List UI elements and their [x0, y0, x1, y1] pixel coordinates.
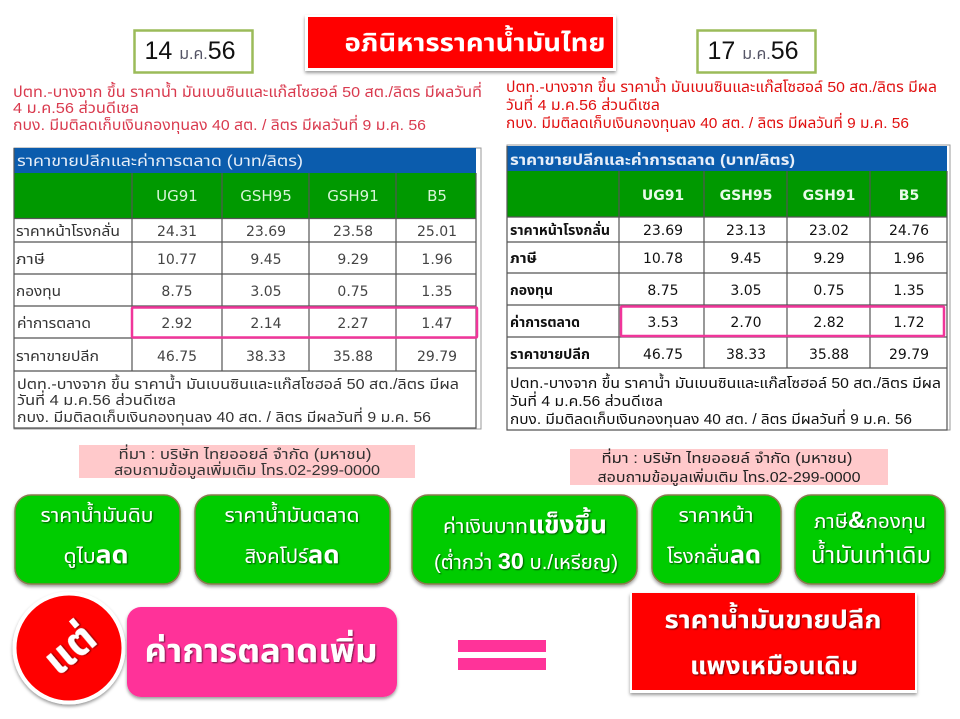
right announcement text: วันที่ 4 ม.ค.56 ส่วนดีเซล	[506, 94, 660, 114]
right price table: 2.82	[813, 315, 845, 331]
right price table: ราคาหน้าโรงกลั่น	[510, 220, 610, 238]
left price table: GSH91	[327, 187, 379, 205]
left announcement text	[13, 81, 482, 134]
title banner: อภินิหารราคาน้ำมันไทย	[344, 25, 606, 57]
right price table: 8.75	[647, 283, 679, 299]
factor box: Singapore market down: ราคาน้ำมันตลาด	[224, 501, 360, 527]
right price table: ราคาขายปลีก	[510, 346, 590, 362]
circle badge: but: แต่	[34, 613, 105, 684]
left price table: 9.29	[337, 252, 369, 268]
right price table: 0.75	[813, 283, 845, 299]
right source note: ที่มา : บริษัท ไทยออยล์ จำกัด (มหาชน)	[602, 448, 852, 467]
left price table: 2.92	[161, 316, 193, 332]
factor box: baht stronger: (ต่ำกว่า 30 บ./เหรียญ)	[434, 548, 618, 574]
left price table: ราคาหน้าโรงกลั่น	[16, 222, 120, 240]
title banner	[305, 15, 616, 71]
right table footnote: กบง. มีมติลดเก็บเงินกองทุนลง 40 สต. / ลิตร มีผลวันที่ 9 ม.ค. 56	[510, 409, 912, 428]
factor box: Dubai crude down: ราคาน้ำมันดิบ	[40, 501, 154, 527]
right price table: 23.02	[809, 223, 849, 239]
left price table: ภาษี	[16, 252, 45, 268]
right price table: 24.76	[889, 223, 929, 239]
left table footnote	[17, 374, 459, 426]
factor box: ex-refinery down: โรงกลั่นลด	[667, 541, 761, 569]
equals sign	[458, 640, 546, 670]
right price table: 10.78	[643, 251, 683, 267]
factor box: Dubai crude down: ดูไบลด	[64, 541, 128, 569]
left price table: ราคาขายปลีกและค่าการตลาด (บาท/ลิตร)	[17, 152, 303, 170]
left price table: 2.14	[250, 316, 282, 332]
left price table: 1.35	[421, 284, 453, 300]
left source note: ที่มา : บริษัท ไทยออยล์ จำกัด (มหาชน)	[118, 444, 372, 463]
right price table: กองทุน	[510, 282, 553, 299]
left price table: GSH95	[240, 187, 292, 205]
factor box: tax and fund unchanged: น้ำมันเท่าเดิม	[811, 539, 931, 568]
right price table: 23.69	[643, 223, 683, 239]
left table footnote: วันที่ 4 ม.ค.56 ส่วนดีเซล	[17, 390, 176, 409]
result box: retail price remains high: แพงเหมือนเดิม	[690, 652, 858, 680]
factor box: Singapore market down	[195, 495, 390, 584]
factor box: Singapore market down: สิงคโปร์ลด	[244, 541, 340, 569]
right price table: GSH95	[720, 188, 772, 204]
right announcement text	[506, 76, 937, 132]
right price table: ค่าการตลาด	[510, 314, 580, 330]
date label: 14 ม.ค.56	[134, 30, 252, 72]
left price table: B5	[427, 187, 447, 205]
left price table: 23.58	[333, 224, 373, 240]
left price table	[14, 148, 481, 429]
right source note	[570, 448, 888, 486]
left price table: ค่าการตลาด	[17, 315, 91, 332]
right price table: 38.33	[726, 347, 766, 363]
result box: retail price remains high	[630, 593, 917, 693]
left table footnote: กบง. มีมติลดเก็บเงินกองทุนลง 40 สต. / ลิตร มีผลวันที่ 9 ม.ค. 56	[17, 407, 431, 426]
right table footnote: ปตท.-บางจาก ขึ้น ราคาน้ำ มันเบนซินและแก๊สโซฮอล์ 50 สต./ลิตร มีผล	[510, 373, 941, 392]
left price table: 8.75	[161, 284, 193, 300]
left price table: 25.01	[417, 224, 457, 240]
left price table: 1.96	[421, 252, 453, 268]
date label: 14 ม.ค.56: 14 ม.ค.56	[144, 37, 236, 65]
factor box: ex-refinery down: ราคาหน้า	[678, 504, 754, 527]
right source note: สอบถามข้อมูลเพิ่มเติม โทร.02-299-0000	[598, 468, 860, 486]
left announcement text: กบง. มีมติลดเก็บเงินกองทุนลง 40 สต. / ลิตร มีผลวันที่ 9 ม.ค. 56	[13, 114, 426, 134]
left price table: 1.47	[421, 316, 453, 332]
right announcement text: กบง. มีมติลดเก็บเงินกองทุนลง 40 สต. / ลิตร มีผลวันที่ 9 ม.ค. 56	[506, 112, 909, 132]
right price table: 46.75	[643, 347, 683, 363]
date label: 17 ม.ค.56: 17 ม.ค.56	[707, 37, 799, 65]
left announcement text: 4 ม.ค.56 ส่วนดีเซล	[13, 99, 139, 117]
pink box: marketing margin rises	[127, 607, 397, 697]
right price table: 9.29	[813, 251, 845, 267]
factor box: Dubai crude down	[15, 495, 180, 584]
right price table: UG91	[642, 188, 684, 204]
left price table: 24.31	[157, 224, 197, 240]
left price table: 9.45	[250, 252, 282, 268]
right price table	[507, 145, 950, 430]
left price table: 23.69	[246, 224, 286, 240]
right highlight: marketing margin	[621, 306, 944, 336]
right price table: 2.70	[730, 315, 762, 331]
right table footnote	[510, 373, 941, 428]
right price table: 35.88	[809, 347, 849, 363]
left highlight: marketing margin	[132, 308, 477, 338]
factor box: tax and fund unchanged: ภาษี&กองทุน	[814, 507, 926, 534]
result box: retail price remains high: ราคาน้ำมันขายปลีก	[664, 602, 882, 634]
right price table: 23.13	[726, 223, 766, 239]
left announcement text: ปตท.-บางจาก ขึ้น ราคาน้ำ มันเบนซินและแก๊สโซฮอล์ 50 สต./ลิตร มีผลวันที่	[13, 81, 482, 101]
left table footnote: ปตท.-บางจาก ขึ้น ราคาน้ำ มันเบนซินและแก๊สโซฮอล์ 50 สต./ลิตร มีผล	[17, 374, 459, 393]
left source note	[79, 444, 415, 479]
date label: 17 ม.ค.56	[698, 30, 816, 72]
factor box: baht stronger: ค่าเงินบาทแข็งขึ้น	[443, 507, 607, 539]
factor box: tax and fund unchanged	[795, 495, 945, 584]
circle badge: but	[14, 594, 124, 702]
left price table: กองทุน	[16, 284, 61, 300]
right price table: GSH91	[803, 188, 855, 204]
right price table: 9.45	[730, 251, 762, 267]
right price table: 1.72	[893, 315, 925, 331]
left source note: สอบถามข้อมูลเพิ่มเติม โทร.02-299-0000	[114, 461, 380, 479]
left price table: ราคาขายปลีก	[16, 349, 99, 365]
left price table: 0.75	[337, 284, 369, 300]
factor box: ex-refinery down	[652, 495, 781, 584]
right price table: 29.79	[889, 347, 929, 363]
right announcement text: ปตท.-บางจาก ขึ้น ราคาน้ำ มันเบนซินและแก๊สโซฮอล์ 50 สต./ลิตร มีผล	[506, 76, 937, 96]
left price table: 29.79	[417, 349, 457, 365]
right price table: 1.35	[893, 283, 925, 299]
right table footnote: วันที่ 4 ม.ค.56 ส่วนดีเซล	[510, 391, 663, 410]
right price table: 3.05	[730, 283, 762, 299]
right price table: 3.53	[647, 315, 679, 331]
pink box: marketing margin rises: ค่าการตลาดเพิ่ม	[144, 629, 378, 669]
right price table: B5	[899, 188, 919, 204]
left price table: UG91	[156, 187, 198, 205]
right price table: ราคาขายปลีกและค่าการตลาด (บาท/ลิตร)	[510, 151, 795, 169]
left price table: 46.75	[157, 349, 197, 365]
left price table: 3.05	[250, 284, 282, 300]
left price table: 38.33	[246, 349, 286, 365]
left price table: 10.77	[157, 252, 197, 268]
right price table: 1.96	[893, 251, 925, 267]
left price table: 2.27	[337, 316, 369, 332]
right price table: ภาษี	[510, 250, 537, 266]
factor box: baht stronger	[412, 495, 637, 584]
left price table: 35.88	[333, 349, 373, 365]
